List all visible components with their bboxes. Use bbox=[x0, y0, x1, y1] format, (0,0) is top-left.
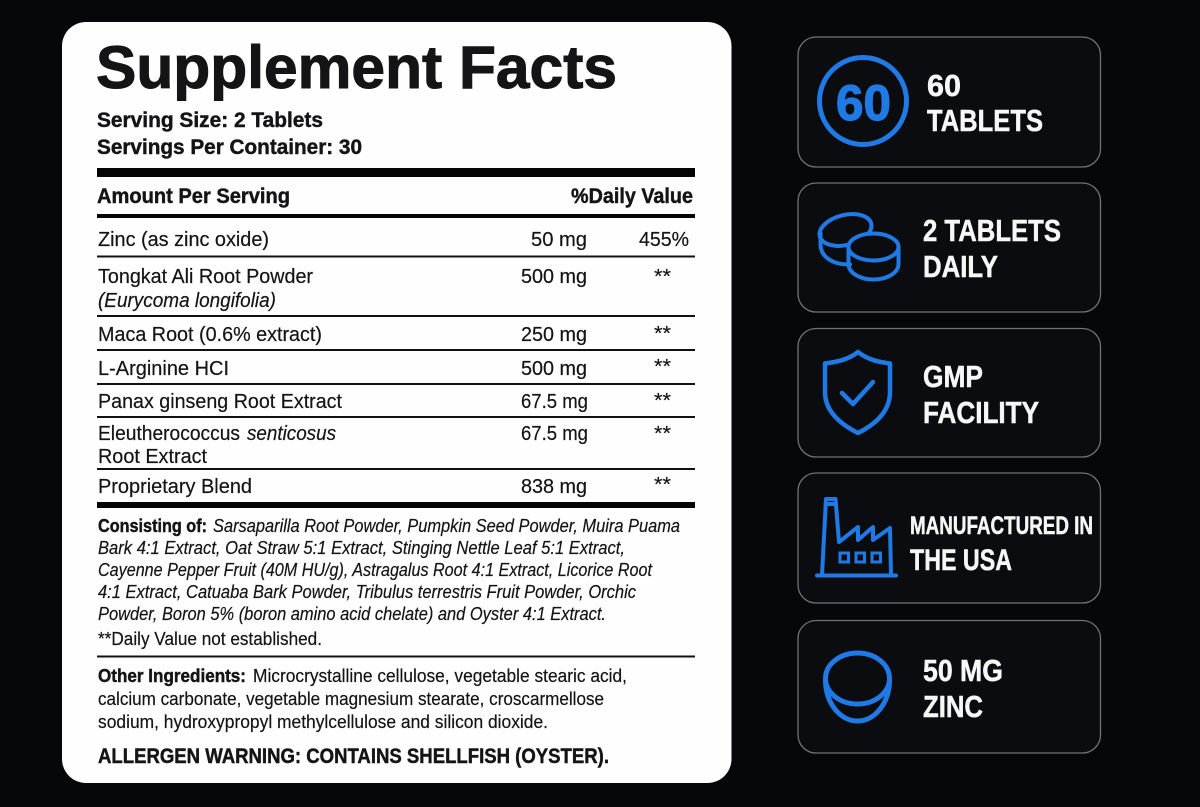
label: manufactured in the usa: THE USA bbox=[910, 544, 1012, 577]
label: gmp facility: FACILITY bbox=[923, 395, 1039, 430]
label: 60 tablets bbox=[927, 68, 1043, 138]
serving information: Servings Per Container: 30 bbox=[97, 135, 362, 159]
row: zinc bbox=[98, 228, 689, 251]
icon: 60 in circle: 60 bbox=[836, 75, 891, 131]
row: zinc: Zinc (as zinc oxide) bbox=[98, 228, 269, 251]
row: eleutherococcus: senticosus bbox=[247, 422, 336, 445]
row: eleutherococcus: 67.5 mg bbox=[521, 422, 588, 445]
label: 60 tablets: 60 bbox=[927, 68, 961, 103]
row: zinc: 455% bbox=[639, 228, 689, 251]
row: maca root bbox=[98, 322, 671, 346]
table header: %Daily Value bbox=[571, 184, 693, 208]
row: eleutherococcus: Eleutherococcus bbox=[98, 422, 240, 445]
label: manufactured in the usa bbox=[910, 512, 1093, 577]
other ingredients text block: Other Ingredients: bbox=[98, 665, 246, 686]
row: eleutherococcus: Root Extract bbox=[98, 445, 207, 468]
row: zinc: 50 mg bbox=[531, 228, 587, 251]
consisting of text block: Cayenne Pepper Fruit (40M HU/g), Astragalus Root 4:1 Extract, Licorice Root bbox=[98, 559, 653, 580]
row: tongkat ali: ** bbox=[654, 265, 671, 288]
icon: factory bbox=[817, 499, 896, 576]
label: gmp facility: GMP bbox=[923, 359, 983, 394]
footnote: **Daily Value not established. bbox=[98, 628, 322, 649]
row: maca root: Maca Root (0.6% extract) bbox=[98, 323, 322, 346]
row: maca root: ** bbox=[654, 322, 671, 345]
label: manufactured in the usa: MANUFACTURED IN bbox=[910, 512, 1093, 540]
panel: gmp facility bbox=[798, 328, 1100, 457]
row: proprietary blend: Proprietary Blend bbox=[98, 475, 252, 498]
other ingredients text block bbox=[98, 665, 627, 732]
row: l-arginine bbox=[98, 355, 671, 380]
other ingredients text block: sodium, hydroxypropyl methylcellulose and silicon dioxide. bbox=[98, 711, 548, 732]
row: panax ginseng: ** bbox=[654, 389, 671, 412]
title: Supplement Facts bbox=[96, 34, 617, 101]
icon: shield with check bbox=[825, 352, 890, 433]
row: panax ginseng: Panax ginseng Root Extract bbox=[98, 390, 342, 413]
row: l-arginine: 500 mg bbox=[521, 357, 587, 380]
row: eleutherococcus bbox=[98, 422, 671, 468]
row: tongkat ali bbox=[98, 265, 671, 312]
nutrient table bbox=[97, 228, 695, 498]
consisting of text block: Bark 4:1 Extract, Oat Straw 5:1 Extract, Stinging Nettle Leaf 5:1 Extract, bbox=[98, 537, 625, 558]
label: 2 tablets daily bbox=[923, 213, 1061, 284]
panel: supplement facts label bbox=[62, 22, 732, 783]
label: 50 mg zinc: 50 MG bbox=[923, 653, 1003, 688]
consisting of text block: Consisting of: bbox=[98, 515, 207, 536]
label: 60 tablets: TABLETS bbox=[927, 103, 1043, 138]
row: maca root: 250 mg bbox=[521, 323, 587, 346]
other ingredients text block: calcium carbonate, vegetable magnesium stearate, croscarmellose bbox=[98, 688, 604, 709]
consisting of text block: 4:1 Extract, Catuaba Bark Powder, Tribulus terrestris Fruit Powder, Orchic bbox=[98, 581, 637, 602]
panel: 60 tablets bbox=[798, 37, 1100, 167]
consisting of text block: Sarsaparilla Root Powder, Pumpkin Seed Powder, Muira Puama bbox=[213, 515, 680, 536]
panel: 2 tablets daily bbox=[798, 183, 1100, 312]
row: tongkat ali: Tongkat Ali Root Powder bbox=[98, 265, 313, 288]
icon: two tablets bbox=[816, 209, 898, 280]
serving information bbox=[97, 108, 362, 159]
row: proprietary blend bbox=[98, 473, 671, 498]
label: 2 tablets daily: 2 TABLETS bbox=[923, 213, 1061, 248]
row: eleutherococcus: ** bbox=[654, 422, 671, 445]
row: panax ginseng bbox=[98, 389, 671, 413]
icon: zinc tablet bbox=[826, 653, 890, 721]
label: 50 mg zinc: ZINC bbox=[923, 689, 983, 724]
table header bbox=[97, 184, 693, 208]
consisting of text block bbox=[98, 515, 680, 624]
other ingredients text block: Microcrystalline cellulose, vegetable stearic acid, bbox=[253, 665, 627, 686]
consisting of text block: Powder, Boron 5% (boron amino acid chelate) and Oyster 4:1 Extract. bbox=[98, 603, 606, 624]
panel: manufactured in the usa bbox=[798, 473, 1100, 603]
serving information: Serving Size: 2 Tablets bbox=[97, 108, 323, 132]
row: tongkat ali: (Eurycoma longifolia) bbox=[98, 289, 276, 312]
row: l-arginine: L-Arginine HCI bbox=[98, 357, 229, 380]
label: 2 tablets daily: DAILY bbox=[923, 249, 998, 284]
row: l-arginine: ** bbox=[654, 355, 671, 378]
row: proprietary blend: 838 mg bbox=[521, 475, 587, 498]
row: panax ginseng: 67.5 mg bbox=[521, 390, 588, 413]
row: tongkat ali: 500 mg bbox=[521, 265, 587, 288]
table header: Amount Per Serving bbox=[97, 184, 290, 208]
label: gmp facility bbox=[923, 359, 1039, 430]
label: 50 mg zinc bbox=[923, 653, 1003, 724]
row: proprietary blend: ** bbox=[654, 473, 671, 496]
allergen warning: ALLERGEN WARNING: CONTAINS SHELLFISH (OYSTER). bbox=[98, 745, 609, 768]
panel: 50 mg zinc bbox=[798, 620, 1100, 753]
icon: 60 in circle bbox=[820, 58, 906, 144]
